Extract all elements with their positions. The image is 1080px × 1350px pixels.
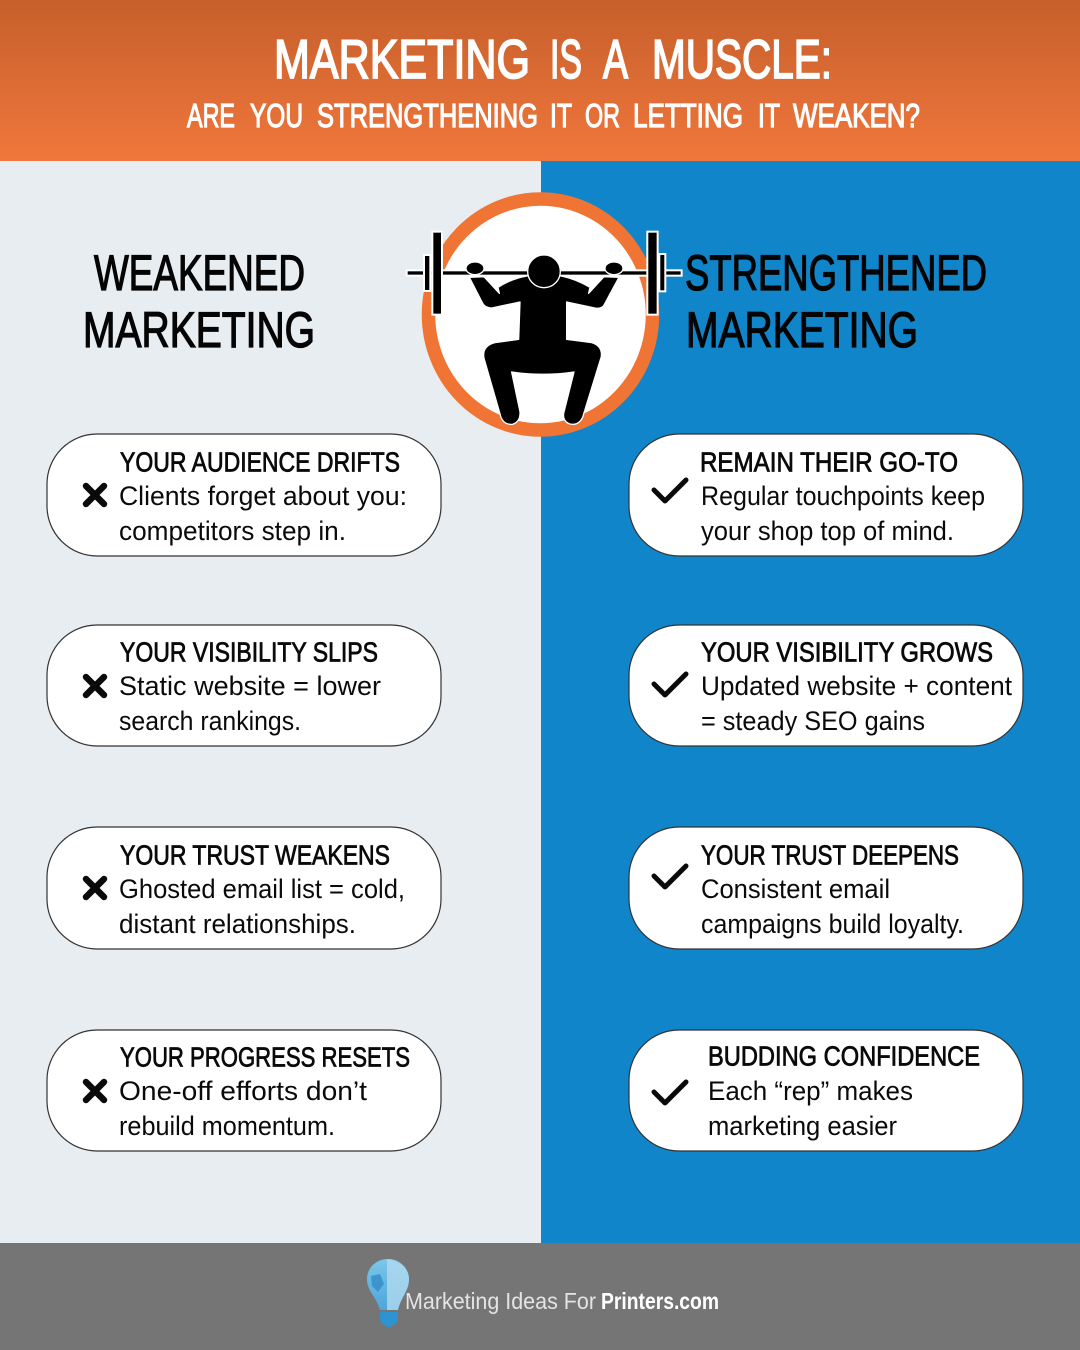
card text	[701, 840, 964, 939]
heading: weakened marketing: WEAKENED	[94, 245, 305, 301]
card text: YOUR TRUST DEEPENS	[701, 840, 959, 870]
subtitle: WEAKEN?	[793, 97, 920, 134]
footer band	[0, 1243, 1080, 1350]
subtitle: YOU	[250, 97, 303, 134]
card text: Each “rep” makes	[708, 1076, 913, 1106]
card text: Updated website + content	[701, 671, 1012, 701]
panel: weakened card 4	[47, 1030, 441, 1151]
card text: YOUR VISIBILITY GROWS	[701, 636, 993, 668]
subtitle: STRENGTHENING	[317, 97, 538, 134]
subtitle: OR	[585, 97, 620, 134]
panel: weakened background	[0, 161, 541, 1244]
icon: check mark	[654, 480, 686, 501]
subtitle: IT	[758, 97, 780, 134]
panel: strengthened card 4	[629, 1030, 1023, 1151]
subtitle	[187, 97, 920, 134]
card text: YOUR TRUST WEAKENS	[120, 840, 390, 870]
heading: weakened marketing: MARKETING	[83, 302, 315, 358]
card text: campaigns build loyalty.	[701, 909, 964, 939]
card text: rebuild momentum.	[119, 1111, 335, 1141]
logo text: Printers.com	[601, 1288, 719, 1314]
icon: x mark	[86, 1082, 104, 1100]
subtitle: LETTING	[633, 97, 743, 134]
icon: check mark	[654, 674, 686, 695]
card text: marketing easier	[708, 1111, 897, 1141]
card text	[708, 1040, 980, 1141]
panel: strengthened background	[541, 161, 1080, 1244]
icon: x mark	[86, 486, 104, 504]
card text: your shop top of mind.	[701, 516, 954, 546]
card text: YOUR VISIBILITY SLIPS	[120, 636, 378, 668]
card text: YOUR AUDIENCE DRIFTS	[120, 446, 400, 478]
card text: YOUR PROGRESS RESETS	[120, 1042, 410, 1072]
title: IS	[550, 29, 582, 90]
icon: light bulb logo	[367, 1259, 409, 1327]
title: A	[603, 29, 628, 90]
card text: One-off efforts don’t	[119, 1076, 368, 1106]
icon: check mark	[654, 866, 686, 887]
card text	[700, 446, 985, 546]
barbell	[407, 232, 682, 315]
card text: Static website = lower	[119, 671, 381, 701]
subtitle: ARE	[187, 97, 235, 134]
panel: weakened card 2	[47, 625, 441, 746]
icon: check mark	[654, 1082, 686, 1103]
panel: strengthened card 2	[629, 625, 1023, 746]
card text	[701, 636, 1012, 736]
card text: distant relationships.	[119, 909, 356, 939]
icon: x mark	[86, 677, 104, 695]
card text	[119, 636, 381, 736]
card text: Clients forget about you:	[119, 481, 407, 511]
title	[274, 29, 832, 90]
subtitle: IT	[550, 97, 572, 134]
lifter figure	[466, 255, 623, 424]
header banner	[0, 0, 1080, 161]
heading: strengthened marketing: MARKETING	[686, 302, 918, 358]
card text	[119, 446, 407, 546]
card text: Ghosted email list = cold,	[119, 874, 405, 904]
title: MUSCLE:	[652, 29, 832, 90]
heading: strengthened marketing	[685, 245, 987, 358]
card text: Regular touchpoints keep	[701, 481, 985, 511]
panel: weakened card 1	[47, 434, 441, 556]
card text	[119, 1042, 410, 1141]
panel: weakened card 3	[47, 827, 441, 949]
title: MARKETING	[274, 29, 530, 90]
logo text: Marketing Ideas For	[405, 1288, 596, 1314]
card text: search rankings.	[119, 706, 301, 736]
card text: Consistent email	[701, 874, 890, 904]
logo text	[405, 1288, 719, 1314]
icon: x mark	[86, 879, 104, 897]
icon: weightlifter in orange ring	[407, 199, 682, 430]
heading: weakened marketing	[83, 245, 315, 358]
panel: strengthened card 1	[629, 434, 1023, 556]
card text	[119, 840, 405, 939]
card text: BUDDING CONFIDENCE	[708, 1040, 980, 1072]
panel: strengthened card 3	[629, 827, 1023, 949]
card text: REMAIN THEIR GO-TO	[700, 446, 958, 478]
card text: = steady SEO gains	[701, 706, 925, 736]
card text: competitors step in.	[119, 516, 346, 546]
